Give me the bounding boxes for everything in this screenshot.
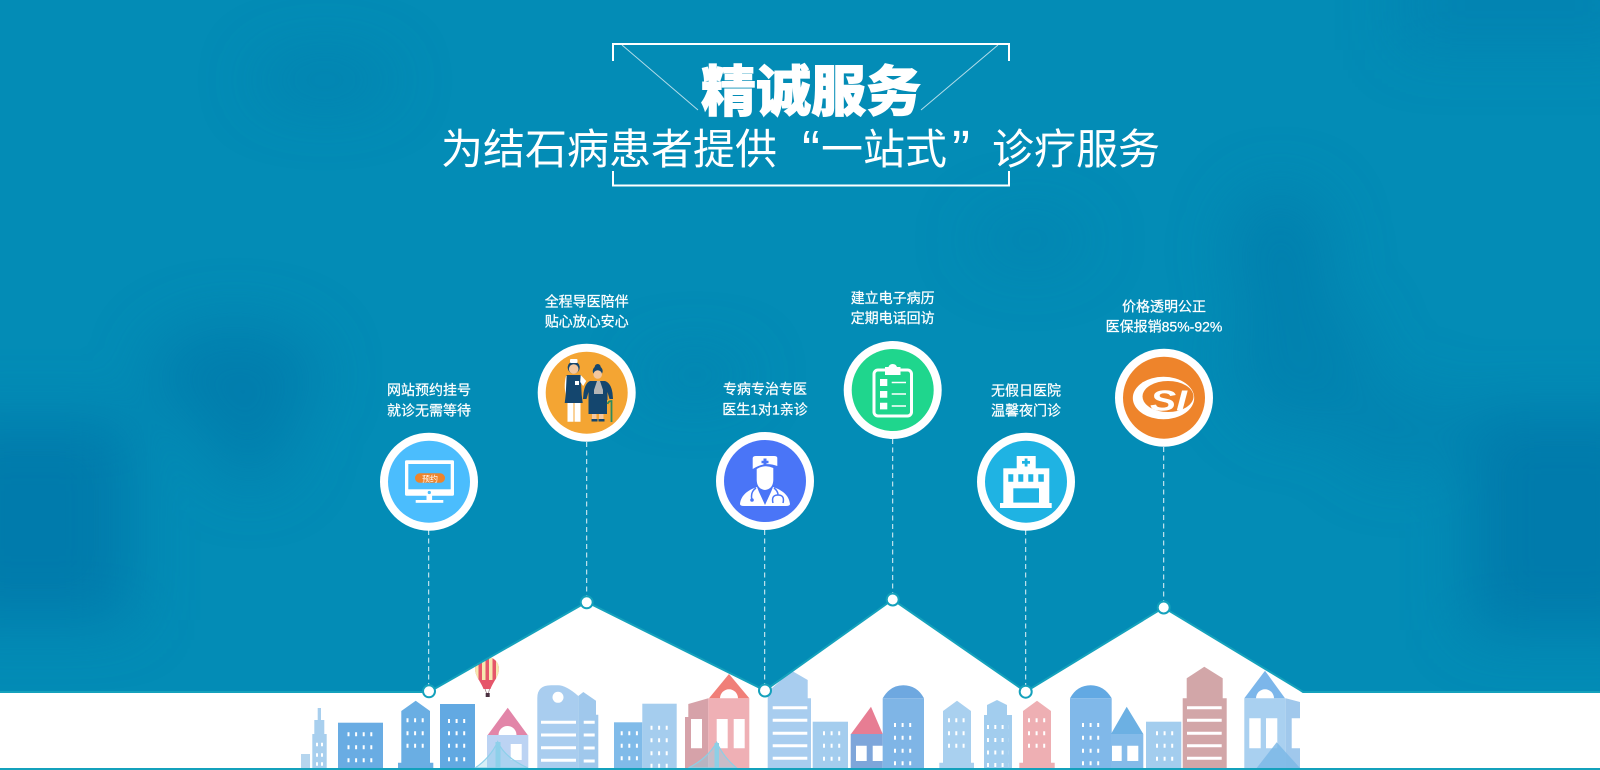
icon: monitor: [405, 460, 454, 503]
red building: [685, 674, 749, 768]
badge: [538, 344, 636, 442]
badge: [380, 433, 478, 531]
block 2: [440, 704, 475, 768]
icon: monitor: 预约: [422, 474, 438, 484]
pink house tower: [1019, 701, 1055, 768]
icon: clipboard: [874, 364, 912, 416]
balloon: [475, 658, 499, 697]
item: no holiday: [977, 382, 1075, 531]
label: 专病专治专医: [723, 381, 807, 397]
label: 医保报销85%-92%: [1106, 318, 1222, 334]
left tower: [301, 708, 327, 768]
block 1: [338, 723, 383, 768]
label: 定期电话回访: [851, 310, 935, 326]
house tower 1: [398, 701, 433, 768]
bottom band: [0, 768, 1600, 770]
subtitle: 为结石病患者提供: [441, 126, 777, 173]
blue house: [1111, 707, 1143, 768]
icon: hospital: [1000, 456, 1052, 508]
label: 网站预约挂号: [387, 382, 471, 398]
block 4: [813, 722, 848, 768]
badge: [1115, 349, 1213, 447]
label: 医生1对1亲诊: [722, 401, 808, 417]
brown tower: [1183, 667, 1227, 768]
subtitle: “: [802, 120, 820, 180]
label: 无假日医院: [991, 382, 1061, 398]
badge: [716, 432, 814, 530]
subtitle: 一站式: [821, 126, 947, 173]
subtitle: ”: [952, 120, 970, 180]
badge: [844, 341, 942, 439]
label: 温馨夜门诊: [991, 402, 1061, 418]
item: escort: [538, 294, 636, 442]
badge: [977, 433, 1075, 531]
item: pricing: [1106, 298, 1222, 447]
icon: doctor: [740, 456, 790, 506]
right roof building: [1244, 671, 1300, 768]
item: specialist: [716, 381, 814, 530]
domed tower 2: [1070, 685, 1112, 768]
line nodes: [423, 594, 1170, 698]
title frame: [613, 44, 1009, 186]
label: 全程导医陪伴: [545, 294, 629, 310]
icon: SI logo: SI: [1150, 386, 1188, 418]
label: 建立电子病历: [851, 290, 935, 306]
zigzag line: [0, 600, 1600, 692]
icon: SI logo: [1133, 377, 1194, 419]
item: online booking: [380, 382, 478, 531]
domed tower 1: [883, 685, 924, 768]
block 5: [1146, 722, 1181, 768]
item: medical record: [844, 290, 942, 439]
label: 价格透明公正: [1122, 298, 1206, 314]
icon: nurse and elder: [565, 359, 613, 422]
striped tower: [537, 685, 598, 768]
blocks 3: [614, 704, 677, 768]
title: 精诚服务: [701, 47, 921, 127]
pale towers: [939, 700, 1012, 768]
dashed connector lines: [429, 439, 1164, 686]
cityscape: [301, 655, 1300, 768]
striped tower 2: [768, 671, 811, 768]
subtitle: 诊疗服务: [992, 126, 1160, 173]
label: 就诊无需等待: [387, 403, 471, 419]
red roof house: [851, 707, 883, 768]
label: 贴心放心安心: [545, 314, 629, 330]
pink roof house: [475, 708, 528, 768]
white ground with zigzag edge: [0, 600, 1600, 770]
